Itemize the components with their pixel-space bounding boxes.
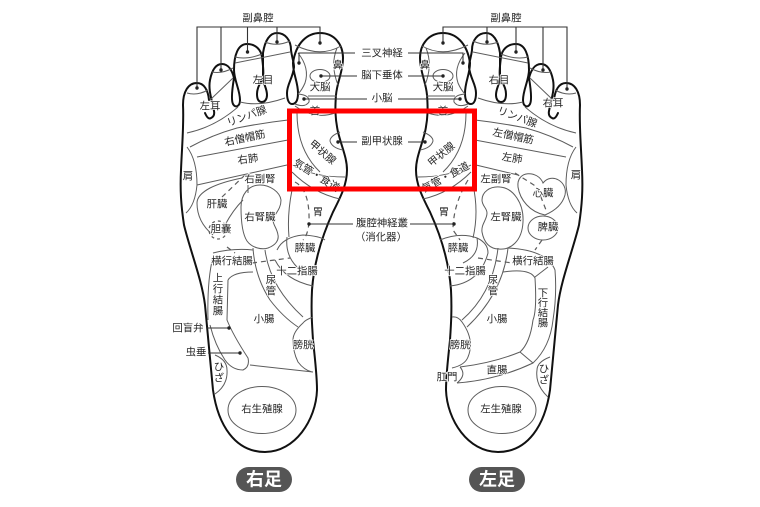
- left foot labels: 膀胱: [450, 340, 471, 352]
- central labels: 副鼻腔: [490, 12, 522, 24]
- left foot labels: 直腸: [487, 364, 507, 376]
- right foot labels: 行: [213, 282, 223, 296]
- left foot labels: 左肺: [501, 150, 523, 166]
- central labels: 虫垂: [186, 346, 206, 358]
- right foot labels: 左目: [253, 74, 273, 86]
- left foot labels: 大脳: [433, 80, 453, 94]
- right foot labels: 胆嚢: [211, 222, 232, 236]
- right foot labels: 首: [310, 104, 320, 118]
- left foot outline: [416, 33, 582, 452]
- left foot labels: 鼻: [420, 58, 430, 72]
- badge: left foot: [469, 467, 525, 492]
- right foot zones: toes and upper sole: [186, 41, 345, 213]
- right foot labels: 膵臓: [295, 242, 316, 254]
- left foot labels: 下: [538, 288, 548, 300]
- central labels: 副鼻腔: [242, 12, 274, 24]
- left foot labels: 左僧帽筋: [492, 125, 535, 147]
- left foot labels: リンパ腺: [496, 104, 540, 130]
- left foot labels: 十二指腸: [444, 264, 486, 278]
- right foot labels: 横行結腸: [211, 254, 253, 268]
- central labels: 腹腔神経叢: [356, 216, 408, 230]
- leader dots: [195, 40, 569, 355]
- right foot labels: 右僧帽筋: [223, 127, 266, 149]
- right foot labels: 右肺: [237, 151, 259, 167]
- central labels: 副甲状腺: [361, 134, 403, 148]
- right foot labels: ざ: [214, 372, 225, 384]
- right foot labels: 気管・食道: [291, 156, 343, 195]
- right foot labels: ひ: [214, 362, 224, 374]
- left foot labels: 左生殖腺: [480, 402, 522, 416]
- left foot labels: 肛門: [437, 372, 457, 384]
- left foot labels: 胃: [439, 206, 449, 218]
- central labels: （消化器）: [355, 230, 407, 244]
- right foot outline: [181, 33, 347, 452]
- left foot labels: 気管・食道: [420, 159, 472, 195]
- left foot labels: 肩: [571, 170, 581, 182]
- right foot labels: 十二指腸: [276, 264, 318, 278]
- central labels: [172, 12, 522, 358]
- left foot labels: 右耳: [543, 96, 563, 110]
- right foot labels: 腸: [213, 306, 223, 318]
- right foot labels: 尿: [266, 274, 276, 286]
- left foot labels: 行: [538, 296, 548, 310]
- left foot labels: 結: [538, 306, 548, 320]
- central labels: 脳下垂体: [361, 70, 403, 82]
- right foot labels: 右生殖腺: [241, 402, 283, 416]
- left foot labels: 左副腎: [480, 172, 512, 186]
- right foot zones: organs: [197, 175, 325, 434]
- badge: right foot: 右足: [246, 470, 282, 490]
- left foot labels: [420, 58, 581, 416]
- left foot labels: 左腎臓: [490, 210, 522, 224]
- right foot labels: 上: [213, 272, 223, 284]
- red highlight rectangle: [290, 111, 474, 189]
- badge: left foot: 左足: [479, 470, 515, 490]
- left foot labels: 甲状腺: [425, 139, 458, 169]
- central labels: 回盲弁: [172, 322, 204, 334]
- right foot labels: 甲状腺: [307, 137, 339, 168]
- right foot labels: 管: [266, 284, 276, 298]
- left foot labels: 心臓: [533, 188, 554, 200]
- right foot labels: 胃: [313, 206, 323, 218]
- right foot labels: 右副腎: [244, 172, 276, 186]
- left foot labels: ひ: [539, 364, 549, 376]
- left foot labels: 横行結腸: [512, 254, 554, 268]
- right foot labels: 小腸: [254, 314, 274, 326]
- right foot labels: 大脳: [310, 80, 330, 94]
- right foot labels: 左耳: [200, 100, 220, 112]
- left foot labels: 腸: [538, 318, 548, 330]
- left foot zones: toes and upper sole: [418, 41, 577, 213]
- right foot labels: 肝臓: [207, 198, 228, 210]
- central labels: 小脳: [372, 92, 392, 104]
- right foot labels: 膀胱: [293, 340, 314, 352]
- right foot labels: 鼻: [333, 58, 343, 72]
- left foot labels: ざ: [539, 374, 550, 386]
- right foot labels: リンパ腺: [225, 103, 269, 129]
- leader lines: sinus brackets: [197, 27, 567, 89]
- right foot labels: 右腎臓: [244, 210, 276, 224]
- right foot labels: [183, 58, 343, 416]
- left foot labels: 小腸: [487, 314, 507, 326]
- leader lines: central labels: [207, 53, 463, 353]
- left foot labels: 脾臓: [538, 220, 559, 234]
- central labels: 三叉神経: [361, 46, 403, 60]
- right foot labels: 結: [213, 294, 223, 306]
- left foot labels: 尿: [488, 274, 498, 286]
- left foot labels: 膵臓: [448, 242, 469, 254]
- left foot labels: 首: [438, 104, 448, 118]
- left foot labels: 管: [488, 284, 498, 298]
- left foot zones: organs: [440, 165, 565, 434]
- right foot labels: 肩: [183, 170, 193, 182]
- left foot labels: 右目: [489, 74, 509, 86]
- badge: right foot: [236, 467, 292, 492]
